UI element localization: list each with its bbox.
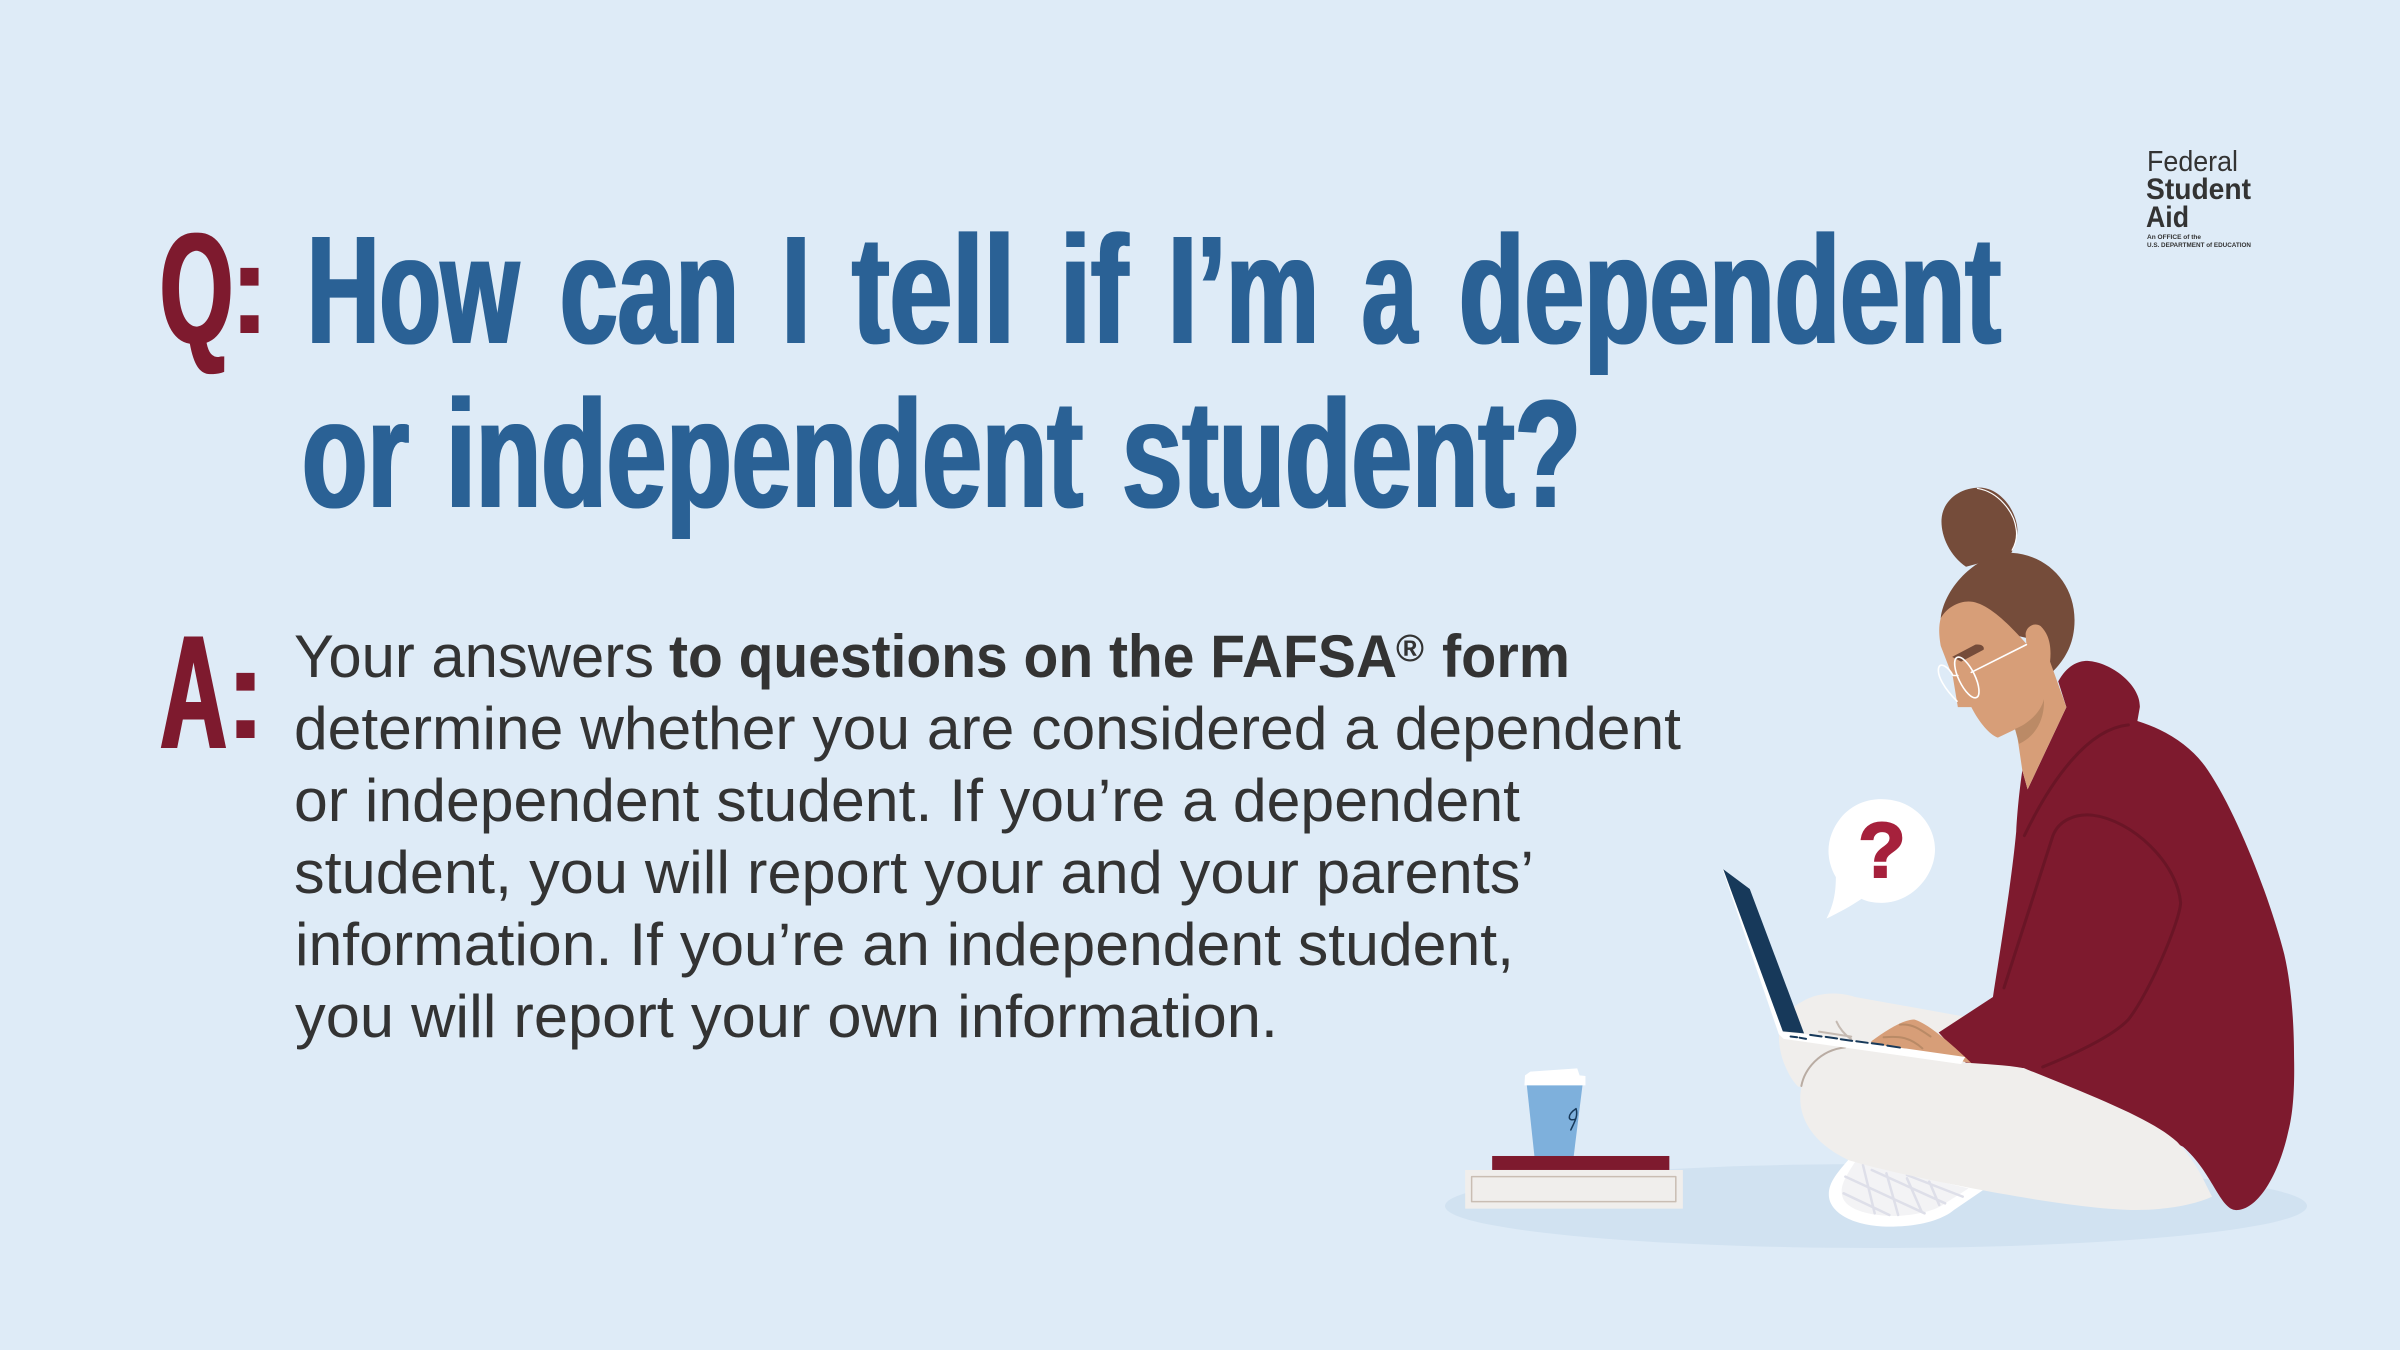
hoodie (1939, 661, 2294, 1210)
logo: Federal Student Aid: Aid (2146, 201, 2189, 234)
answer body text: information. If you’re an independent student, (295, 911, 1514, 978)
heading: question text: dependent (1459, 204, 2001, 376)
heading: question text: can (560, 204, 739, 376)
answer body text: form (1442, 623, 1570, 690)
heading: question text: How (307, 204, 520, 376)
answer label A:: A (160, 602, 227, 783)
back leg on lap (1780, 994, 1965, 1087)
answer body text: Your answers (294, 623, 654, 690)
heading: question text: or (302, 368, 409, 540)
laptop (1722, 869, 1965, 1064)
question label Q:: : (228, 217, 271, 361)
logo: Federal Student Aid: Student (2146, 173, 2251, 206)
hand (1871, 1019, 1971, 1063)
heading: question text: I (782, 204, 810, 376)
speech bubble (1826, 799, 1935, 919)
answer body text: student, you will report your and your parents’ (294, 839, 1534, 906)
answer label A:: : (224, 622, 267, 766)
pants (1779, 1022, 2212, 1210)
heading: question text: a (1362, 204, 1418, 376)
coffee cup (1524, 1068, 1585, 1156)
hair and bun (1941, 488, 2075, 674)
answer body text: you will report your own information. (295, 983, 1278, 1050)
face and neck (1939, 602, 2066, 789)
logo: Federal Student Aid: Federal (2147, 146, 2238, 178)
answer body text: ® (1396, 628, 1424, 670)
question label Q:: Q (160, 201, 233, 377)
heading: question text: I’m (1168, 204, 1319, 376)
answer body text: determine whether you are considered a dependent (294, 695, 1681, 762)
floor shadow (1445, 1164, 2307, 1248)
logo: Federal Student Aid: An OFFICE of the (2147, 234, 2201, 241)
heading: question text: if (1060, 204, 1129, 376)
answer body text: or independent student. If you’re a dependent (294, 767, 1520, 834)
glasses (1938, 645, 2026, 701)
question mark: ? (1858, 806, 1906, 894)
stacked books (1465, 1156, 1683, 1209)
answer body text (294, 623, 1681, 1050)
logo: Federal Student Aid: U.S. DEPARTMENT of EDUCATION (2147, 242, 2251, 249)
sneaker (1829, 1157, 1983, 1227)
heading: question text (302, 204, 2001, 540)
books and coffee cup (1465, 1068, 1683, 1209)
logo: Federal Student Aid (2146, 146, 2251, 249)
heading: question text: student? (1122, 368, 1581, 540)
heading: question text: independent (446, 368, 1083, 540)
illustration: student with laptop (1445, 488, 2307, 1248)
heading: question text: tell (852, 204, 1015, 376)
head and laptop (1722, 488, 2075, 1064)
answer body text: to questions on the FAFSA (669, 623, 1397, 690)
